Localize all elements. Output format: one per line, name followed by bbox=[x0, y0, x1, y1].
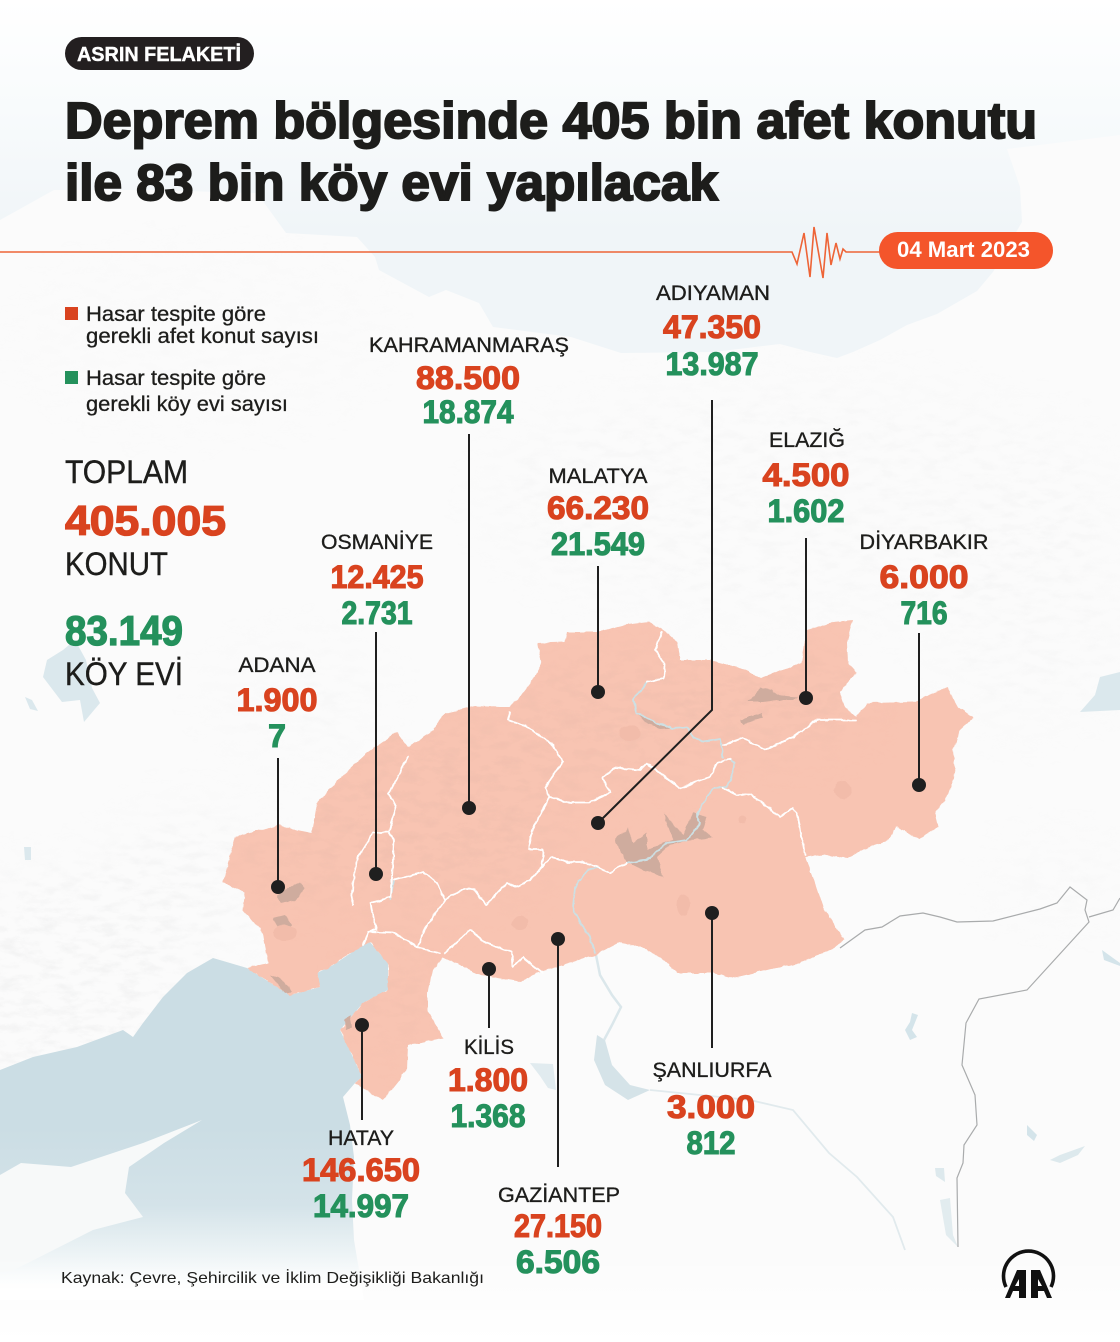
leader: Diyarbakır bbox=[912, 633, 926, 792]
totals: KONUT bbox=[65, 546, 168, 582]
legend: housing: Hasar tespite göre bbox=[86, 303, 266, 326]
legend: village houses: Hasar tespite göre bbox=[86, 367, 266, 390]
label: Kilis: 1.368 bbox=[450, 1098, 526, 1134]
label: Hatay: HATAY bbox=[328, 1127, 394, 1150]
category tag: ASRIN FELAKETİ bbox=[77, 43, 241, 66]
legend: village houses bbox=[65, 367, 288, 416]
label: Adıyaman bbox=[656, 282, 770, 382]
label: Hatay: 14.997 bbox=[313, 1188, 409, 1224]
rivers bbox=[390, 682, 735, 953]
title: ile 83 bin köy evi yapılacak bbox=[65, 154, 719, 211]
label: Kilis: KİLİS bbox=[464, 1036, 514, 1059]
label: Diyarbakır bbox=[860, 531, 988, 631]
label: Adana: 1.900 bbox=[236, 682, 318, 718]
label: Diyarbakır: DİYARBAKIR bbox=[860, 531, 988, 554]
label: Şanlıurfa bbox=[652, 1059, 772, 1161]
label: Adana bbox=[236, 654, 318, 754]
label: Adana: 7 bbox=[268, 718, 286, 754]
label: Şanlıurfa: 812 bbox=[686, 1125, 736, 1161]
label: Osmaniye bbox=[321, 531, 433, 631]
leader: Kahramanmaraş bbox=[462, 434, 476, 815]
date badge: 04 Mart 2023 bbox=[897, 237, 1030, 262]
totals: 405.005 bbox=[65, 497, 226, 544]
label: Adana: ADANA bbox=[238, 654, 316, 677]
label: Hatay: 146.650 bbox=[302, 1152, 420, 1188]
bottom fade bbox=[0, 1255, 1120, 1342]
label: Gaziantep: 6.506 bbox=[516, 1244, 600, 1280]
totals bbox=[65, 454, 226, 692]
label: Hatay bbox=[302, 1127, 420, 1224]
totals: 83.149 bbox=[65, 607, 183, 654]
label: Kahramanmaraş: 88.500 bbox=[416, 360, 520, 396]
label: Diyarbakır: 716 bbox=[900, 595, 948, 631]
label: Kilis: 1.800 bbox=[448, 1062, 528, 1098]
leader: Malatya bbox=[591, 566, 605, 699]
label: Şanlıurfa: ŞANLIURFA bbox=[652, 1059, 772, 1082]
label: Malatya: MALATYA bbox=[548, 465, 648, 488]
label: Kahramanmaraş: 18.874 bbox=[422, 394, 514, 430]
label: Malatya bbox=[547, 465, 649, 562]
title: Deprem bölgesinde 405 bin afet konutu bbox=[65, 92, 1037, 149]
district patches bbox=[273, 725, 852, 941]
label: Adıyaman: 47.350 bbox=[663, 309, 761, 345]
Syria border bbox=[840, 887, 1120, 1247]
label: Şanlıurfa: 3.000 bbox=[667, 1089, 755, 1125]
Mediterranean Sea bbox=[0, 942, 388, 1300]
reservoirs bbox=[270, 688, 797, 1030]
label: Osmaniye: 2.731 bbox=[342, 595, 412, 631]
label: Kahramanmaraş bbox=[369, 334, 569, 430]
leader: Adıyaman bbox=[591, 400, 712, 830]
label: Osmaniye: OSMANİYE bbox=[321, 531, 433, 554]
leader: Adana bbox=[271, 758, 285, 894]
lakes and rivers bbox=[24, 640, 1120, 1250]
leader: Hatay bbox=[355, 1018, 369, 1120]
label: Diyarbakır: 6.000 bbox=[880, 559, 968, 595]
totals: TOPLAM bbox=[65, 454, 188, 490]
label: Osmaniye: 12.425 bbox=[330, 559, 424, 595]
label: Gaziantep: GAZİANTEP bbox=[498, 1184, 620, 1207]
title bbox=[65, 92, 1037, 211]
label: Malatya: 66.230 bbox=[547, 490, 649, 526]
label: Malatya: 21.549 bbox=[551, 526, 645, 562]
source: Kaynak: Çevre, Şehircilik ve İklim Değişikliği Bakanlığı bbox=[61, 1268, 484, 1287]
leader: Elazığ bbox=[799, 538, 813, 705]
label: Elazığ: 1.602 bbox=[768, 493, 844, 529]
earthquake region map bbox=[222, 620, 974, 1100]
label: Gaziantep bbox=[498, 1184, 620, 1280]
region fill bbox=[223, 620, 973, 1100]
province borders bbox=[352, 632, 856, 973]
leader: Kilis bbox=[482, 962, 496, 1028]
leader: Osmaniye bbox=[369, 632, 383, 881]
category tag bbox=[65, 37, 254, 70]
date badge bbox=[879, 232, 1053, 269]
label: Kahramanmaraş: KAHRAMANMARAŞ bbox=[369, 334, 569, 357]
seismograph line bbox=[0, 227, 882, 278]
legend: housing bbox=[65, 303, 319, 348]
leader: Şanlıurfa bbox=[705, 906, 719, 1048]
legend: housing: gerekli afet konut sayısı bbox=[86, 325, 319, 348]
label: Gaziantep: 27.150 bbox=[514, 1208, 602, 1244]
Cyprus bbox=[0, 1120, 202, 1272]
label: Elazığ bbox=[762, 429, 850, 529]
legend: village houses: gerekli köy evi sayısı bbox=[86, 393, 288, 416]
icon: AA logo bbox=[1004, 1251, 1054, 1298]
label: Adıyaman: 13.987 bbox=[666, 346, 758, 382]
label: Elazığ: ELAZIĞ bbox=[769, 429, 845, 452]
Black Sea bbox=[0, 0, 1120, 358]
label: Adıyaman: ADIYAMAN bbox=[656, 282, 770, 305]
totals: KÖY EVİ bbox=[65, 656, 183, 692]
label: Kilis bbox=[448, 1036, 528, 1134]
label: Elazığ: 4.500 bbox=[762, 457, 850, 493]
leader: Gaziantep bbox=[551, 932, 565, 1167]
